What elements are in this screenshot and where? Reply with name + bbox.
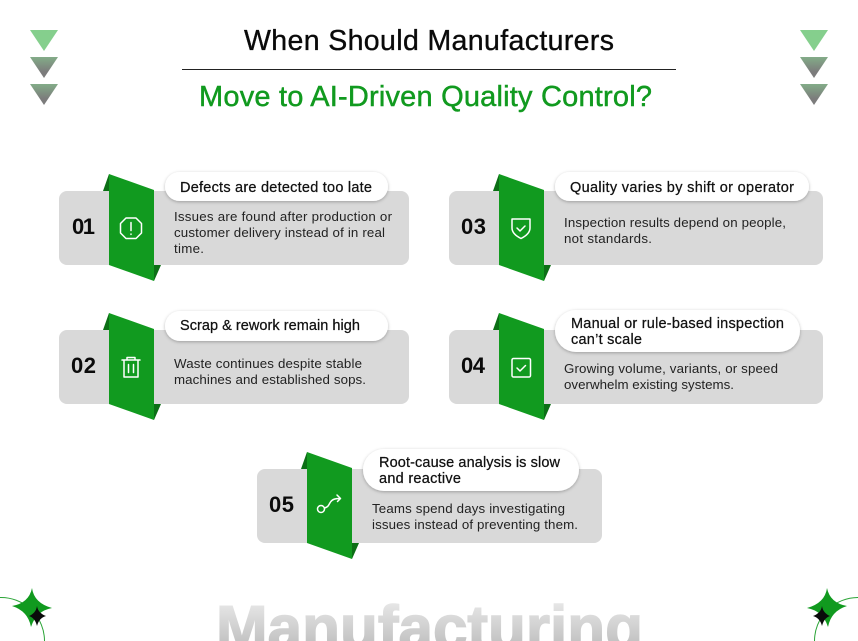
panel: 04 manual inspection: 04 xyxy=(461,353,486,378)
panel: 02 scrap and rework: machines and established sops. xyxy=(174,372,366,387)
panel: 02 scrap and rework: Waste continues despite stable xyxy=(174,356,362,371)
panel: 04 manual inspection: overwhelm existing systems. xyxy=(564,377,734,392)
panel: 01 defects detected too late: Issues are found after production or xyxy=(174,209,393,224)
icon: warning octagon xyxy=(120,218,142,238)
panel: 03 quality varies: Quality varies by shift or operator xyxy=(570,180,794,196)
icon: route arrow xyxy=(318,495,340,512)
panel: 01 defects detected too late xyxy=(59,172,409,281)
panel: 03 quality varies xyxy=(449,172,823,281)
panel: 01 defects detected too late: Defects are detected too late xyxy=(180,180,372,196)
panel: 02 scrap and rework: Scrap & rework remain high xyxy=(180,318,360,334)
icon: left sparkle xyxy=(0,588,52,641)
icon: shield check xyxy=(512,219,530,238)
panel: 05 root-cause analysis: Teams spend days investigating xyxy=(372,501,565,516)
icon: trash bin xyxy=(122,358,140,377)
icon: checkbox xyxy=(512,358,530,377)
icon: right triangles xyxy=(800,30,828,105)
panel: 01 defects detected too late: time. xyxy=(174,241,204,256)
panel: 01 defects detected too late: customer delivery instead of in real xyxy=(174,225,385,240)
panel: 05 root-cause analysis: issues instead of preventing them. xyxy=(372,517,578,532)
panel: 05 root-cause analysis: Root-cause analysis is slow xyxy=(379,455,561,471)
panel: 05 root-cause analysis xyxy=(257,449,602,559)
panel: 04 manual inspection: Manual or rule-based inspection xyxy=(571,316,784,332)
panel: 02 scrap and rework: 02 xyxy=(71,353,96,378)
panel: 01 defects detected too late: 01 xyxy=(72,214,95,239)
panel: 05 root-cause analysis: 05 xyxy=(269,492,294,517)
panel: 04 manual inspection: can’t scale xyxy=(571,332,642,348)
title line 1: When Should Manufacturers xyxy=(244,25,614,57)
panel: 04 manual inspection xyxy=(449,310,823,420)
title line 2: Move to AI-Driven Quality Control? xyxy=(199,81,652,113)
panel: 03 quality varies: not standards. xyxy=(564,231,652,246)
panel: 03 quality varies: Inspection results depend on people, xyxy=(564,215,786,230)
icon: left triangles xyxy=(30,30,58,105)
panel: 03 quality varies: 03 xyxy=(461,214,486,239)
panel: 04 manual inspection: Growing volume, variants, or speed xyxy=(564,361,778,376)
icon: right sparkle xyxy=(807,588,858,641)
panel: 02 scrap and rework xyxy=(59,311,409,420)
panel: 05 root-cause analysis: and reactive xyxy=(379,471,461,487)
